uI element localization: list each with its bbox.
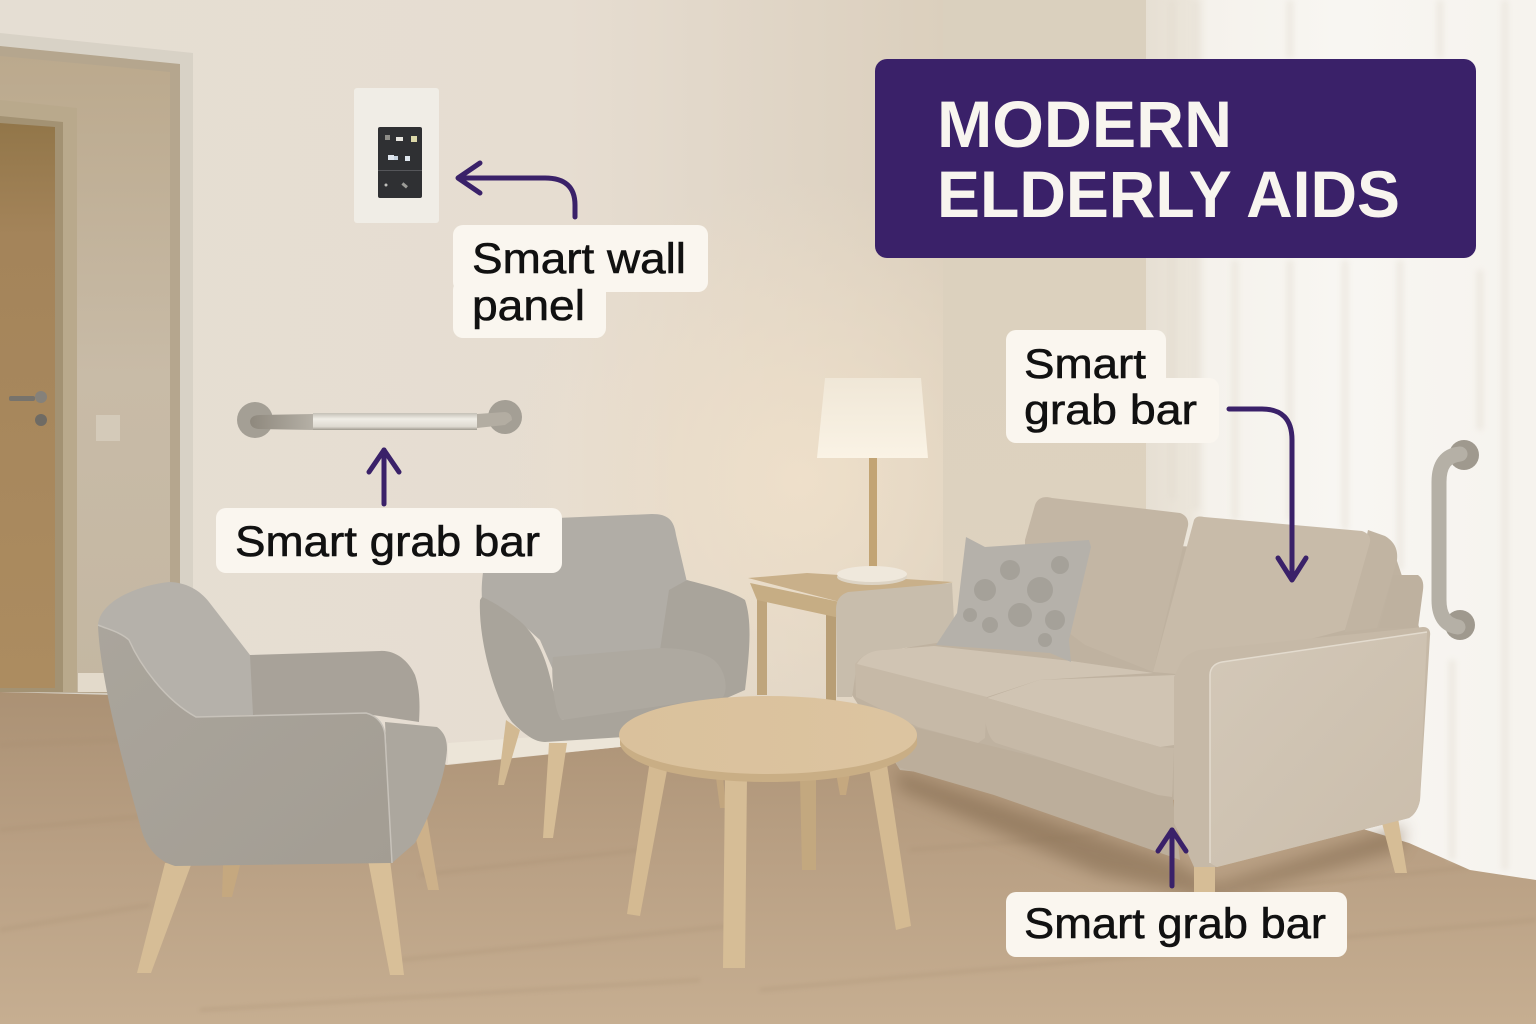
door <box>0 123 55 688</box>
sofa seat cushions <box>855 646 1176 797</box>
callout: smart wall panel <box>453 225 708 338</box>
callout: smart grab bar left: Smart grab bar <box>235 518 540 566</box>
callout: smart wall panel: panel <box>472 282 585 330</box>
arrow: to vertical grab bar <box>1229 409 1306 580</box>
callout: smart grab bar upper right: grab bar <box>1024 386 1197 433</box>
callout: smart grab bar bottom: Smart grab bar <box>1024 900 1326 948</box>
floor <box>0 692 1536 1024</box>
left armchair <box>98 582 447 975</box>
sofa <box>836 497 1430 900</box>
icon: smart wall panel <box>354 88 439 223</box>
curtain <box>1146 0 1536 880</box>
panel screen <box>378 127 422 198</box>
title banner <box>875 59 1476 258</box>
round coffee table <box>619 696 917 968</box>
inner door frame <box>0 100 77 692</box>
title text: ELDERLY AIDS <box>937 157 1400 231</box>
callout: smart grab bar upper right <box>1006 330 1219 443</box>
sofa underlay <box>852 540 1420 800</box>
middle armchair <box>480 514 750 838</box>
sofa right arm <box>1174 627 1430 867</box>
callout: smart grab bar upper right: Smart <box>1024 340 1146 387</box>
throw pillow <box>936 537 1091 662</box>
callout: smart wall panel: Smart wall <box>472 235 686 283</box>
callout: smart grab bar bottom <box>1006 892 1347 957</box>
sofa left arm <box>836 583 955 697</box>
arrow: to sofa <box>1158 830 1186 886</box>
table lamp <box>817 378 928 585</box>
title text <box>937 87 1400 231</box>
icon: wall grab bar <box>237 400 522 438</box>
chair seat <box>385 722 447 863</box>
sofa base <box>885 720 1180 860</box>
arrow: to wall panel <box>458 163 575 217</box>
sofa back <box>1025 497 1423 674</box>
chair inner arm <box>250 651 420 722</box>
chair inner back <box>98 582 253 717</box>
title text: MODERN <box>937 87 1232 161</box>
arrow: to wall grab bar <box>369 450 399 504</box>
chair seat <box>552 648 726 720</box>
icon: vertical grab bar <box>1439 440 1479 640</box>
sofa shadow <box>895 770 1405 900</box>
chair outer arms <box>480 580 750 742</box>
side table <box>748 573 953 702</box>
chair outer body <box>98 625 392 866</box>
doorway <box>0 33 193 697</box>
callout: smart grab bar left <box>216 508 562 573</box>
chair back <box>482 514 687 670</box>
